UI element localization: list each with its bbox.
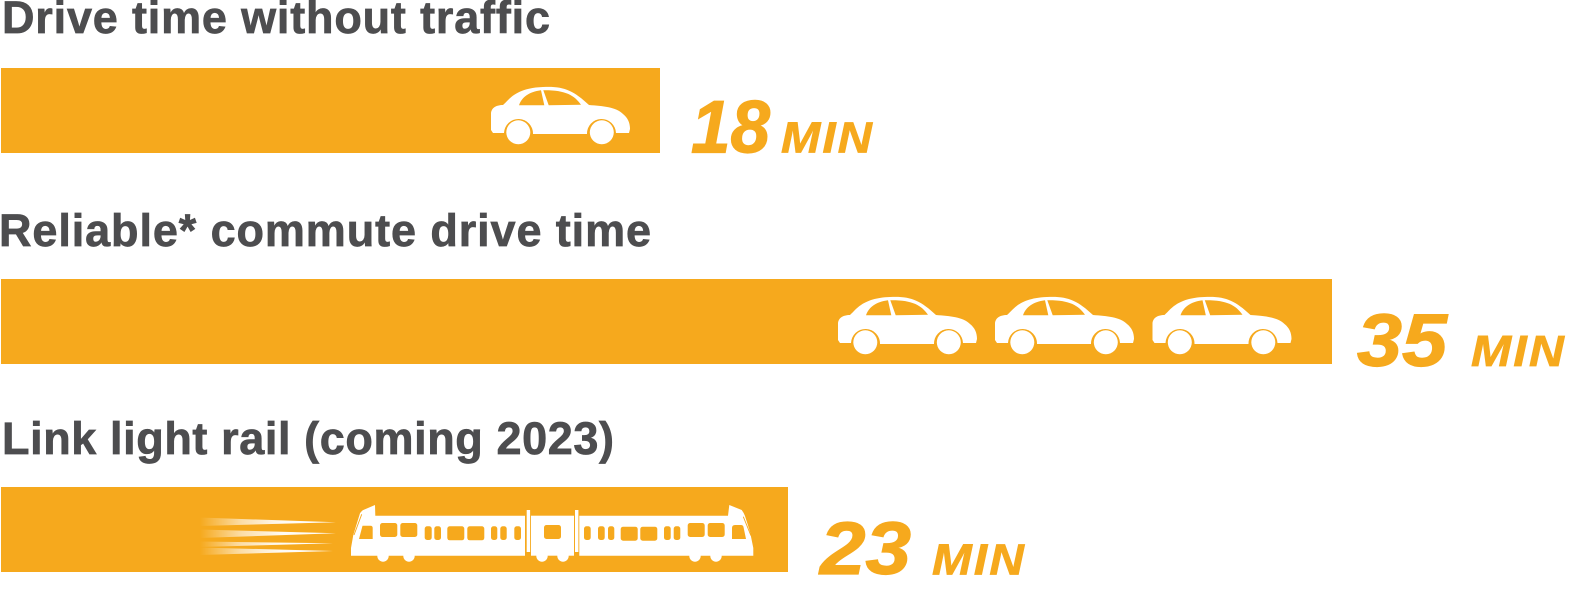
value: 23 min: 23 <box>818 507 911 590</box>
icon: train <box>351 505 753 562</box>
value: 35 min: 35 <box>1357 299 1449 382</box>
train windows <box>359 523 746 541</box>
icon: car <box>491 87 630 144</box>
value: 23 min <box>818 507 1026 590</box>
train wheels <box>377 550 722 562</box>
icon: car 1 <box>838 297 977 354</box>
train nose stripes <box>354 514 751 536</box>
value: 18 min <box>691 86 874 168</box>
train body <box>351 505 753 556</box>
value: 18 min: MIN <box>781 114 874 162</box>
bar: 23 minutes <box>1 487 788 572</box>
icon: car 3 <box>1152 297 1292 354</box>
heading: link light rail: Link light rail (coming 2023) <box>2 413 614 464</box>
bar: 18 minutes <box>1 68 660 153</box>
value: 35 min: MIN <box>1471 327 1566 376</box>
icon: car 2 <box>995 297 1134 354</box>
value: 23 min: MIN <box>932 536 1026 584</box>
value: 18 min: 18 <box>691 86 771 168</box>
icon: speed streaks <box>200 518 336 555</box>
value: 35 min <box>1357 299 1566 382</box>
bar: 35 minutes <box>1 279 1332 364</box>
heading: reliable commute drive time: Reliable* commute drive time <box>0 205 651 256</box>
